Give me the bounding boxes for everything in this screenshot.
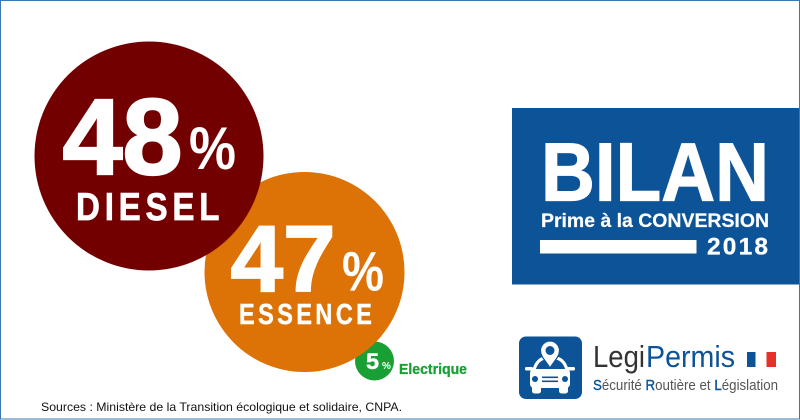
circle: electrique: 5	[366, 349, 379, 374]
circle: diesel	[34, 42, 264, 270]
divider bar	[540, 240, 696, 254]
panel: bilan banner	[512, 108, 799, 284]
sources note: Sources : Ministère de la Transition écologique et solidaire, CNPA.	[41, 400, 402, 414]
wordmark: Legi	[593, 339, 645, 374]
icon: french flag	[747, 352, 776, 367]
circle: diesel: DIESEL	[76, 184, 224, 229]
icon: car with location pin	[519, 336, 582, 399]
year: 2018	[707, 234, 768, 260]
subheading: Prime à la CONVERSION	[541, 210, 769, 232]
circle: essence	[204, 172, 404, 372]
circle: electrique	[355, 342, 467, 380]
circle: essence: 47	[230, 206, 336, 311]
circle: electrique: Electrique	[399, 361, 467, 378]
tagline: Sécurité Routière et Législation	[593, 378, 778, 394]
circle: essence: ESSENCE	[239, 298, 375, 331]
circle: essence: %	[342, 240, 384, 302]
circle: diesel: 48	[62, 76, 182, 197]
heading: BILAN: BILAN	[541, 126, 769, 218]
logo: LegiPermis: Permis	[646, 339, 735, 374]
logo: LegiPermis	[519, 336, 778, 399]
circle: electrique: %	[382, 361, 391, 372]
circle: diesel: %	[189, 115, 236, 182]
